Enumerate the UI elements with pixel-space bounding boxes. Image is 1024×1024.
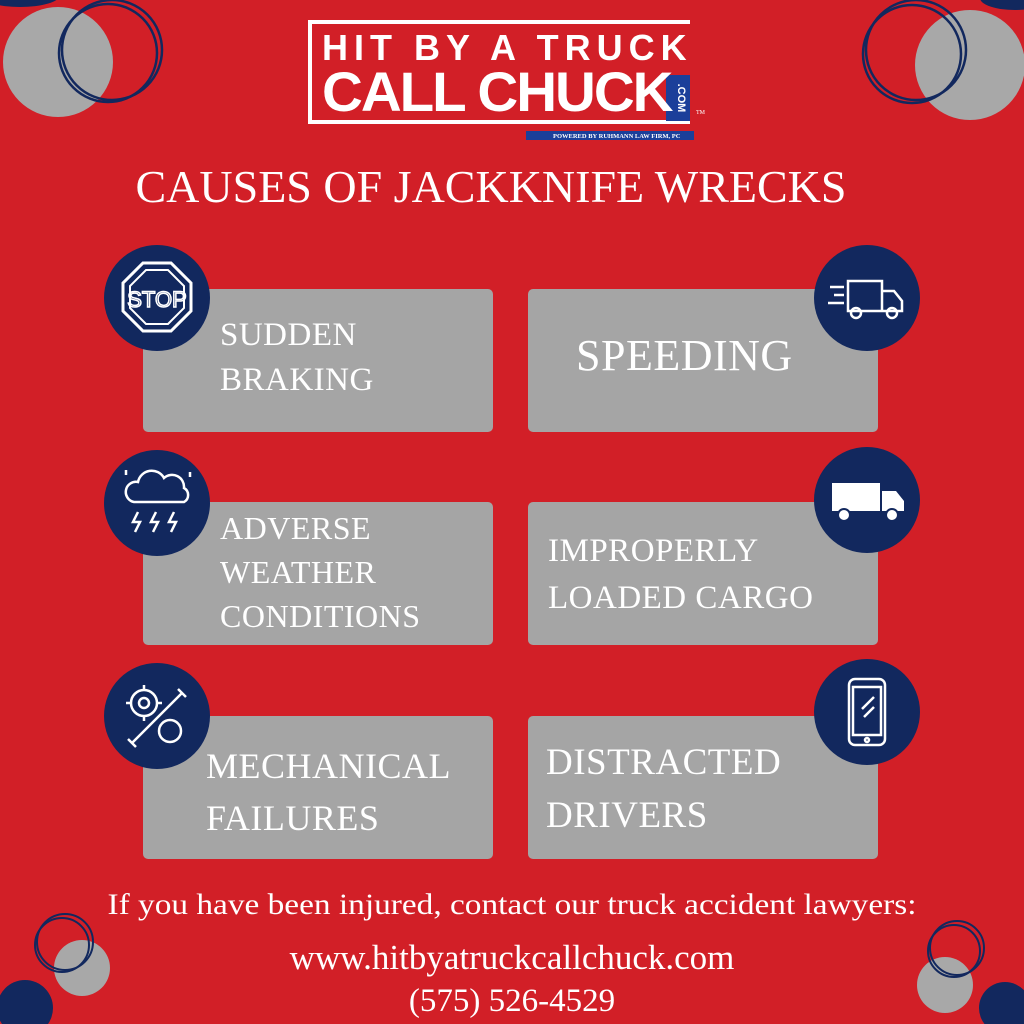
panel: distracted drivers: DRIVERS — [546, 795, 708, 836]
panel: mechanical failures: MECHANICAL — [206, 746, 451, 786]
panel: improperly loaded cargo: LOADED CARGO — [548, 580, 813, 616]
icon: speeding truck — [814, 245, 920, 351]
logo: CALL CHUCK — [322, 60, 672, 123]
logo: POWERED BY RUHMANN LAW FIRM, PC — [553, 133, 681, 140]
icon: smartphone — [814, 659, 920, 765]
panel: adverse weather: CONDITIONS — [220, 598, 421, 634]
panel: mechanical failures: FAILURES — [206, 798, 379, 838]
title: CAUSES OF JACKKNIFE WRECKS — [135, 161, 846, 212]
panel: distracted drivers — [528, 716, 878, 859]
icon: stop sign — [104, 245, 210, 351]
panel: sudden braking: SUDDEN — [220, 317, 357, 353]
panel: sudden braking — [143, 289, 493, 432]
footer text: If you have been injured, contact our truck accident lawyers: — [108, 889, 916, 921]
panel: speeding: SPEEDING — [576, 331, 793, 380]
panel: mechanical failures — [143, 716, 493, 859]
panel: improperly loaded cargo — [528, 502, 878, 645]
logo: HIT BY A TRUCK — [322, 27, 693, 68]
website: www.hitbyatruckcallchuck.com — [290, 938, 734, 977]
panel: adverse weather: WEATHER — [220, 554, 376, 590]
panel: speeding — [528, 289, 878, 432]
panel: adverse weather: ADVERSE — [220, 510, 371, 546]
panel: improperly loaded cargo: IMPROPERLY — [548, 533, 759, 569]
icon: stop sign: STOP — [127, 287, 187, 312]
logo — [308, 20, 706, 140]
icon: storm cloud — [104, 450, 210, 556]
icon: gear and wrench — [104, 663, 210, 769]
panel: sudden braking: BRAKING — [220, 362, 374, 398]
logo: .COM — [675, 84, 687, 112]
phone: (575) 526-4529 — [409, 983, 615, 1019]
panel: distracted drivers: DISTRACTED — [546, 742, 781, 783]
icon: cargo truck — [814, 447, 920, 553]
panel: adverse weather — [143, 502, 493, 645]
logo: TM — [696, 110, 706, 116]
